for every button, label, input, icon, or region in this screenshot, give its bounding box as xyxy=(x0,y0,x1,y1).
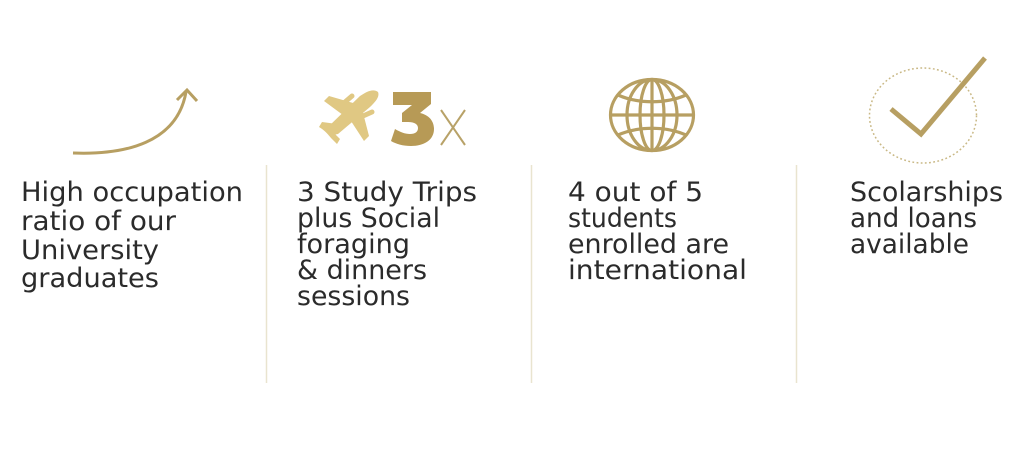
text: study trips xyxy=(297,177,477,312)
text: study trips: sessions xyxy=(297,281,410,312)
text: study trips: & dinners xyxy=(297,255,427,286)
text: occupation ratio: University xyxy=(21,235,159,266)
text: scholarships xyxy=(850,177,1003,260)
text: study trips: plus Social xyxy=(297,203,440,234)
text: scholarships: and loans xyxy=(850,203,977,234)
icon: rising arrow xyxy=(73,90,197,153)
text: scholarships: available xyxy=(850,229,969,260)
text: international students: 4 out of 5 xyxy=(568,177,703,208)
text: scholarships: Scolarships xyxy=(850,177,1003,208)
text: study trips: foraging xyxy=(297,229,410,260)
panel: scholarships xyxy=(850,58,1003,260)
icon: globe xyxy=(610,80,694,150)
panel: study trips xyxy=(297,90,477,312)
text: international students: international xyxy=(568,255,747,286)
icon: 3x multiplier xyxy=(391,92,465,146)
text: study trips: 3 Study Trips xyxy=(297,177,477,208)
text: occupation ratio: graduates xyxy=(21,263,159,294)
panel: international students xyxy=(568,80,747,286)
text: occupation ratio: High occupation xyxy=(21,177,243,208)
text: occupation ratio: ratio of our xyxy=(21,206,177,237)
icon: airplane xyxy=(319,90,378,144)
text: international students xyxy=(568,177,747,286)
panel: occupation ratio xyxy=(21,90,243,294)
text: international students: students xyxy=(568,203,677,234)
icon: dotted circle with check mark xyxy=(870,58,985,163)
text: international students: enrolled are xyxy=(568,229,729,260)
text: occupation ratio xyxy=(21,177,243,294)
